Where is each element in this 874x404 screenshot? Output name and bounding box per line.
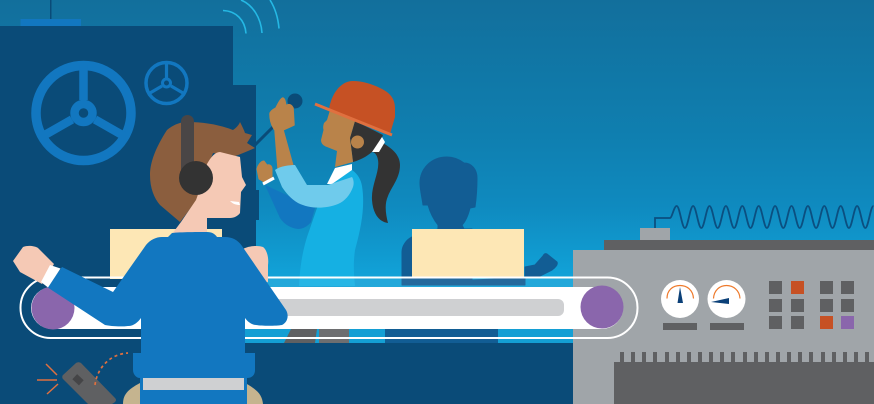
hair <box>150 122 255 222</box>
smile <box>230 201 240 205</box>
small valve wheel <box>146 62 187 104</box>
large valve wheel <box>36 65 131 160</box>
grey machine <box>573 228 874 404</box>
headphone cup <box>179 161 213 195</box>
control buttons <box>769 281 854 329</box>
silhouette coworker <box>385 157 557 343</box>
collar <box>327 164 352 184</box>
dress <box>299 170 363 286</box>
right hand <box>243 246 268 285</box>
neck and face <box>321 110 355 167</box>
dropped phone <box>62 362 116 404</box>
grey track <box>250 299 564 316</box>
dashed arc <box>95 353 128 385</box>
sweater <box>47 232 288 404</box>
raised arm <box>270 98 294 168</box>
boy operator <box>13 115 288 404</box>
purple roller left <box>32 286 74 330</box>
cuff <box>41 265 60 288</box>
belt surface <box>31 287 623 329</box>
helmet brim <box>315 104 392 135</box>
woman engineer <box>255 81 400 286</box>
left hand <box>13 246 54 284</box>
monitor right <box>412 229 524 277</box>
lever <box>255 94 302 145</box>
cuff <box>263 178 274 184</box>
left machine <box>0 0 259 343</box>
ear <box>351 136 364 148</box>
monitor left <box>110 229 222 279</box>
headphone band <box>181 115 194 180</box>
conveyor lower strip <box>245 277 590 343</box>
purple roller right <box>580 286 624 328</box>
neck and face <box>172 152 246 234</box>
machine vent panel <box>614 352 874 404</box>
sleeve <box>275 165 354 208</box>
belt outline <box>20 278 638 338</box>
hair tie <box>372 137 385 152</box>
wifi signal arcs <box>223 0 279 34</box>
lower hand <box>257 161 272 182</box>
hair <box>350 121 383 162</box>
stool <box>123 383 263 404</box>
coil wire <box>655 206 874 228</box>
motion lines <box>37 364 58 394</box>
waist band <box>143 378 244 390</box>
lower arm <box>265 185 315 229</box>
conveyor belt <box>20 278 638 338</box>
gauge 2 <box>708 280 746 330</box>
floor <box>0 343 874 404</box>
helmet <box>329 81 395 134</box>
ponytail <box>372 140 400 223</box>
gauge 1 <box>661 280 699 330</box>
